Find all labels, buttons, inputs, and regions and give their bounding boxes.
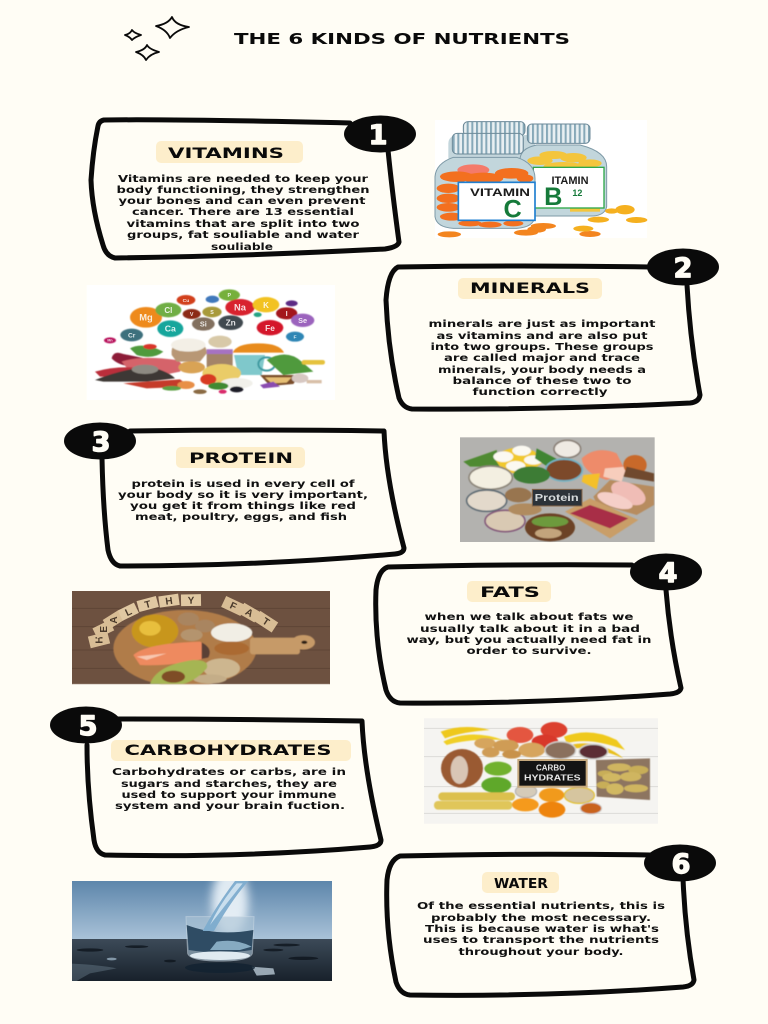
image: mineral bubbles and foods — [87, 285, 335, 400]
text block: water — [417, 901, 665, 958]
text block: minerals: minerals, your body needs a — [438, 365, 646, 376]
panel outline: minerals — [386, 266, 700, 409]
heading chip: minerals: MINERALS — [470, 281, 590, 297]
title: THE 6 KINDS OF NUTRIENTS — [234, 30, 570, 48]
image: vitamin bottles: 12 — [572, 188, 582, 198]
text block: carbohydrates: used to support your immune — [122, 790, 337, 801]
text block: water: throughout your body. — [458, 947, 624, 958]
image: protein foods: Protein — [535, 493, 579, 504]
panel: carbohydrates — [50, 706, 381, 856]
image: mineral bubbles and foods: Cl — [164, 306, 172, 315]
text block: carbohydrates: Carbohydrates or carbs, are in — [112, 767, 346, 778]
image: healthy fat board: A — [243, 607, 255, 620]
image: mineral bubbles and foods: Na — [234, 303, 247, 313]
heading chip: vitamins — [156, 141, 303, 163]
text block: fats: order to survive. — [466, 646, 592, 657]
text block: carbohydrates — [112, 767, 346, 812]
number badge 5 — [50, 706, 122, 744]
image: glass of water — [72, 881, 332, 981]
image: mineral bubbles and foods: P — [228, 293, 232, 299]
text block: minerals: balance of these two to — [452, 376, 632, 387]
text block: vitamins — [116, 174, 370, 253]
heading chip: carbohydrates — [111, 740, 351, 761]
image: mineral bubbles and foods: K — [263, 301, 269, 310]
image: mineral bubbles and foods: Si — [200, 320, 207, 329]
panel: water — [387, 844, 716, 995]
panel outline: water — [387, 854, 694, 995]
text block: minerals: are called major and trace — [444, 353, 640, 364]
heading chip: minerals — [458, 278, 602, 299]
image: vitamin bottles: C — [504, 195, 522, 223]
number badge 1 — [344, 116, 416, 152]
text block: water: uses to transport the nutrients — [423, 935, 659, 946]
heading chip: protein — [176, 447, 305, 468]
image: mineral bubbles and foods: Cr — [128, 332, 136, 339]
text block: fats: usually talk about it in a bad — [420, 624, 640, 635]
text block: minerals: into two groups. These groups — [430, 342, 654, 353]
text block: vitamins: cancer. There are 13 essential — [132, 207, 354, 218]
image: vitamin bottles — [435, 120, 647, 238]
image: carbohydrate foods: CARBO — [536, 763, 565, 772]
image: mineral bubbles and foods: I — [286, 309, 288, 318]
image: mineral bubbles and foods: Cu — [183, 298, 189, 304]
image: vitamin bottles: VITAMIN — [470, 187, 530, 199]
heading chip: protein: PROTEIN — [189, 451, 293, 467]
image: healthy fat board: A — [109, 616, 120, 624]
number badge 6 — [644, 844, 716, 882]
image: mineral bubbles and foods: Fe — [265, 323, 275, 333]
text block: water: probably the most necessary. — [431, 913, 651, 924]
image: healthy fat board: T — [144, 599, 152, 611]
heading chip: water: WATER — [494, 877, 548, 892]
image: mineral bubbles and foods: Mn — [107, 339, 113, 343]
panel outline: vitamins — [91, 120, 399, 258]
panel outline: carbohydrates — [87, 719, 381, 856]
panel: fats — [376, 554, 702, 703]
image: mineral bubbles and foods: Se — [298, 316, 307, 325]
text block: minerals: minerals are just as important — [428, 319, 656, 330]
image: healthy fat board: E — [99, 626, 110, 633]
number badge 5: 5 — [79, 711, 97, 742]
text block: protein: your body so it is very important, — [118, 490, 368, 501]
text block: water: Of the essential nutrients, this is — [417, 901, 665, 912]
image: healthy fat board: H — [165, 596, 174, 608]
number badge 2: 2 — [674, 253, 692, 284]
number badge 3 — [64, 422, 136, 460]
text block: protein — [118, 479, 368, 523]
text block: minerals: function correctly — [472, 387, 608, 398]
image: protein foods — [460, 437, 655, 542]
image: mineral bubbles and foods: S — [210, 310, 214, 316]
icon: sparkles — [125, 17, 189, 60]
image: mineral bubbles and foods: Mg — [139, 313, 153, 323]
image: mineral bubbles and foods: Ca — [165, 324, 176, 334]
heading chip: fats — [467, 581, 551, 602]
image: healthy fat board: T — [260, 616, 271, 629]
heading chip: carbohydrates: CARBOHYDRATES — [124, 743, 332, 759]
panel: vitamins — [91, 116, 416, 258]
text block: vitamins: your bones and can even prevent — [118, 196, 366, 207]
text block: vitamins: vitamins that are split into two — [126, 219, 360, 230]
image: healthy fat board: H — [95, 636, 106, 644]
image: vitamin bottles: B — [544, 183, 562, 211]
panel: minerals — [386, 248, 719, 409]
text block: protein: meat, poultry, eggs, and fish — [135, 512, 347, 523]
image: healthy fat board: L — [124, 606, 134, 619]
number badge 3: 3 — [92, 427, 110, 458]
heading chip: fats: FATS — [480, 585, 540, 601]
text block: minerals — [428, 319, 656, 398]
panel outline: fats — [376, 565, 681, 703]
image: mineral bubbles and foods: V — [190, 312, 194, 318]
text block: vitamins: groups, fat souliable and water — [127, 230, 359, 241]
image: carbohydrate foods: HYDRATES — [524, 773, 581, 783]
panel: protein — [64, 422, 404, 566]
text block: vitamins: souliable — [211, 242, 273, 253]
image: mineral bubbles and foods: F — [293, 335, 297, 341]
number badge 4 — [630, 554, 702, 590]
text block: protein: protein is used in every cell of — [132, 479, 355, 490]
text block: protein: you get it from things like red — [130, 501, 356, 512]
image: carbohydrate foods — [424, 718, 658, 824]
panel outline: protein — [102, 430, 404, 566]
image: vitamin bottles: ITAMIN — [551, 175, 589, 187]
text block: water: This is because water is what's — [425, 924, 659, 935]
text block: carbohydrates: sugars and starches, they are — [121, 779, 337, 790]
number badge 2 — [647, 248, 719, 286]
image: healthy fat board: F — [228, 600, 238, 613]
image: mineral bubbles and foods: Zn — [226, 318, 236, 328]
heading chip: vitamins: VITAMINS — [168, 146, 284, 162]
text block: vitamins: Vitamins are needed to keep your — [118, 174, 368, 185]
text block: vitamins: body functioning, they strengthen — [116, 185, 370, 196]
text block: fats — [406, 612, 652, 657]
text block: carbohydrates: system and your brain fuction. — [115, 801, 345, 812]
number badge 1: 1 — [369, 120, 387, 151]
number badge 4: 4 — [659, 558, 677, 589]
heading chip: water — [482, 872, 559, 893]
text block: fats: way, but you actually need fat in — [406, 635, 652, 646]
text block: fats: when we talk about fats we — [424, 612, 634, 623]
image: healthy fat board — [72, 591, 330, 691]
image: healthy fat board: Y — [188, 596, 195, 607]
text block: minerals: as vitamins and are also put — [436, 331, 648, 342]
number badge 6: 6 — [672, 849, 690, 880]
